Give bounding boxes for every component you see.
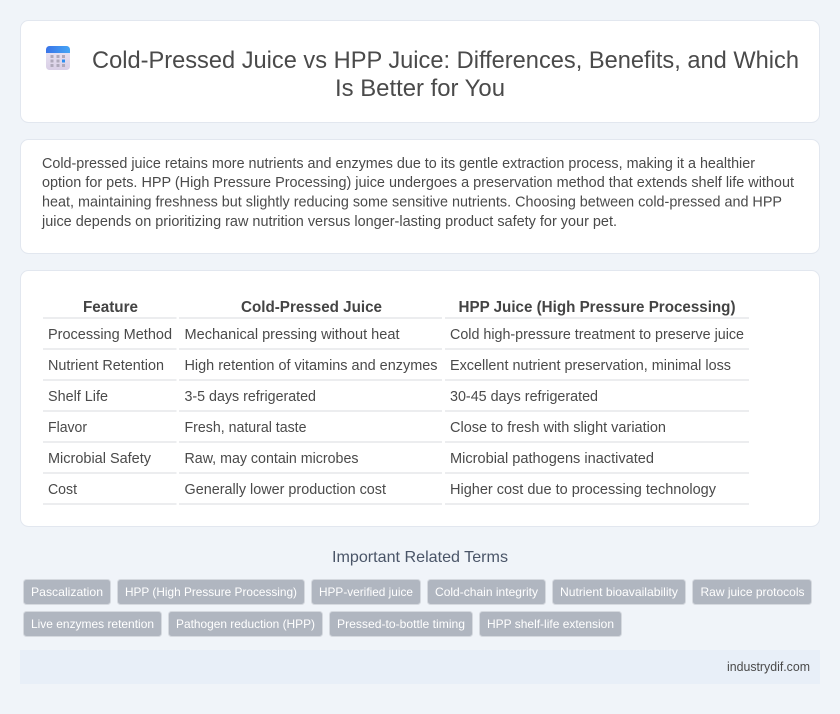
title [92,47,799,102]
footer: industrydif.com [727,659,810,674]
row: shelf life [48,389,598,405]
tags: related terms: HPP-verified juice [319,585,413,599]
row: shelf life: 30-45 days refrigerated [450,389,598,405]
text block: summary [41,156,794,230]
text block: summary: heat, maintaining freshness but slightly reducing some sensitive nutrients. Choosing between cold-pressed and HPP [42,194,782,210]
title: Cold-Pressed Juice vs HPP Juice: Differences, Benefits, and Which [92,47,799,74]
row: flavor: Flavor [48,420,87,436]
tags: related terms: Pascalization [31,585,103,599]
row: flavor: Close to fresh with slight variation [450,420,666,436]
row: nutrient retention: Excellent nutrient preservation, minimal loss [450,358,731,374]
table header [83,299,736,316]
footer [20,650,820,684]
row: shelf life: 3-5 days refrigerated [184,389,316,405]
row: microbial safety: Raw, may contain microbes [184,451,358,467]
tags: related terms: Live enzymes retention [31,617,154,631]
row: microbial safety [48,451,654,467]
row: microbial safety: Microbial Safety [48,451,152,467]
heading: important related terms: Important Related Terms [332,549,508,566]
row: nutrient retention: Nutrient Retention [48,358,164,374]
tags: related terms: Pathogen reduction (HPP) [176,617,315,631]
row: processing method: Processing Method [48,327,172,343]
tags: related terms: Nutrient bioavailability [560,585,678,599]
panel: header [20,20,820,122]
panel: summary paragraph [20,140,820,254]
text block: summary: Cold-pressed juice retains more nutrients and enzymes due to its gentle extraction process, making it a healthier [42,156,755,172]
row: nutrient retention: High retention of vitamins and enzymes [184,358,438,374]
tags: related terms: HPP shelf-life extension [487,617,614,631]
tags: related terms [24,580,812,636]
row: flavor: Fresh, natural taste [184,420,306,436]
row: cost: Cost [48,482,77,498]
text block: summary: option for pets. HPP (High Pressure Processing) juice undergoes a preservation method that extends shelf life without [42,175,794,191]
row: processing method: Cold high-pressure treatment to preserve juice [450,327,744,343]
text block: summary: juice depends on prioritizing raw nutrition versus longer-lasting product safety for your pet. [41,214,617,230]
tags: related terms: Raw juice protocols [700,585,804,599]
row: flavor [48,420,666,436]
table header: Cold-Pressed Juice [241,299,382,316]
table header: Feature [83,299,138,316]
table header: HPP Juice (High Pressure Processing) [458,299,736,316]
row: nutrient retention [48,358,731,374]
row: processing method: Mechanical pressing without heat [184,327,400,343]
row: shelf life: Shelf Life [48,389,108,405]
tags: related terms: Pressed-to-bottle timing [337,617,465,631]
tags: related terms: HPP (High Pressure Processing) [125,585,297,599]
row: processing method [48,327,744,343]
panel: comparison table [20,270,820,526]
title: Is Better for You [335,75,505,102]
row: cost: Higher cost due to processing technology [450,482,717,498]
row: microbial safety: Microbial pathogens inactivated [450,451,654,467]
row: cost: Generally lower production cost [184,482,386,498]
tags: related terms: Cold-chain integrity [435,585,538,599]
row: cost [48,482,717,498]
icon: calendar [46,46,70,70]
